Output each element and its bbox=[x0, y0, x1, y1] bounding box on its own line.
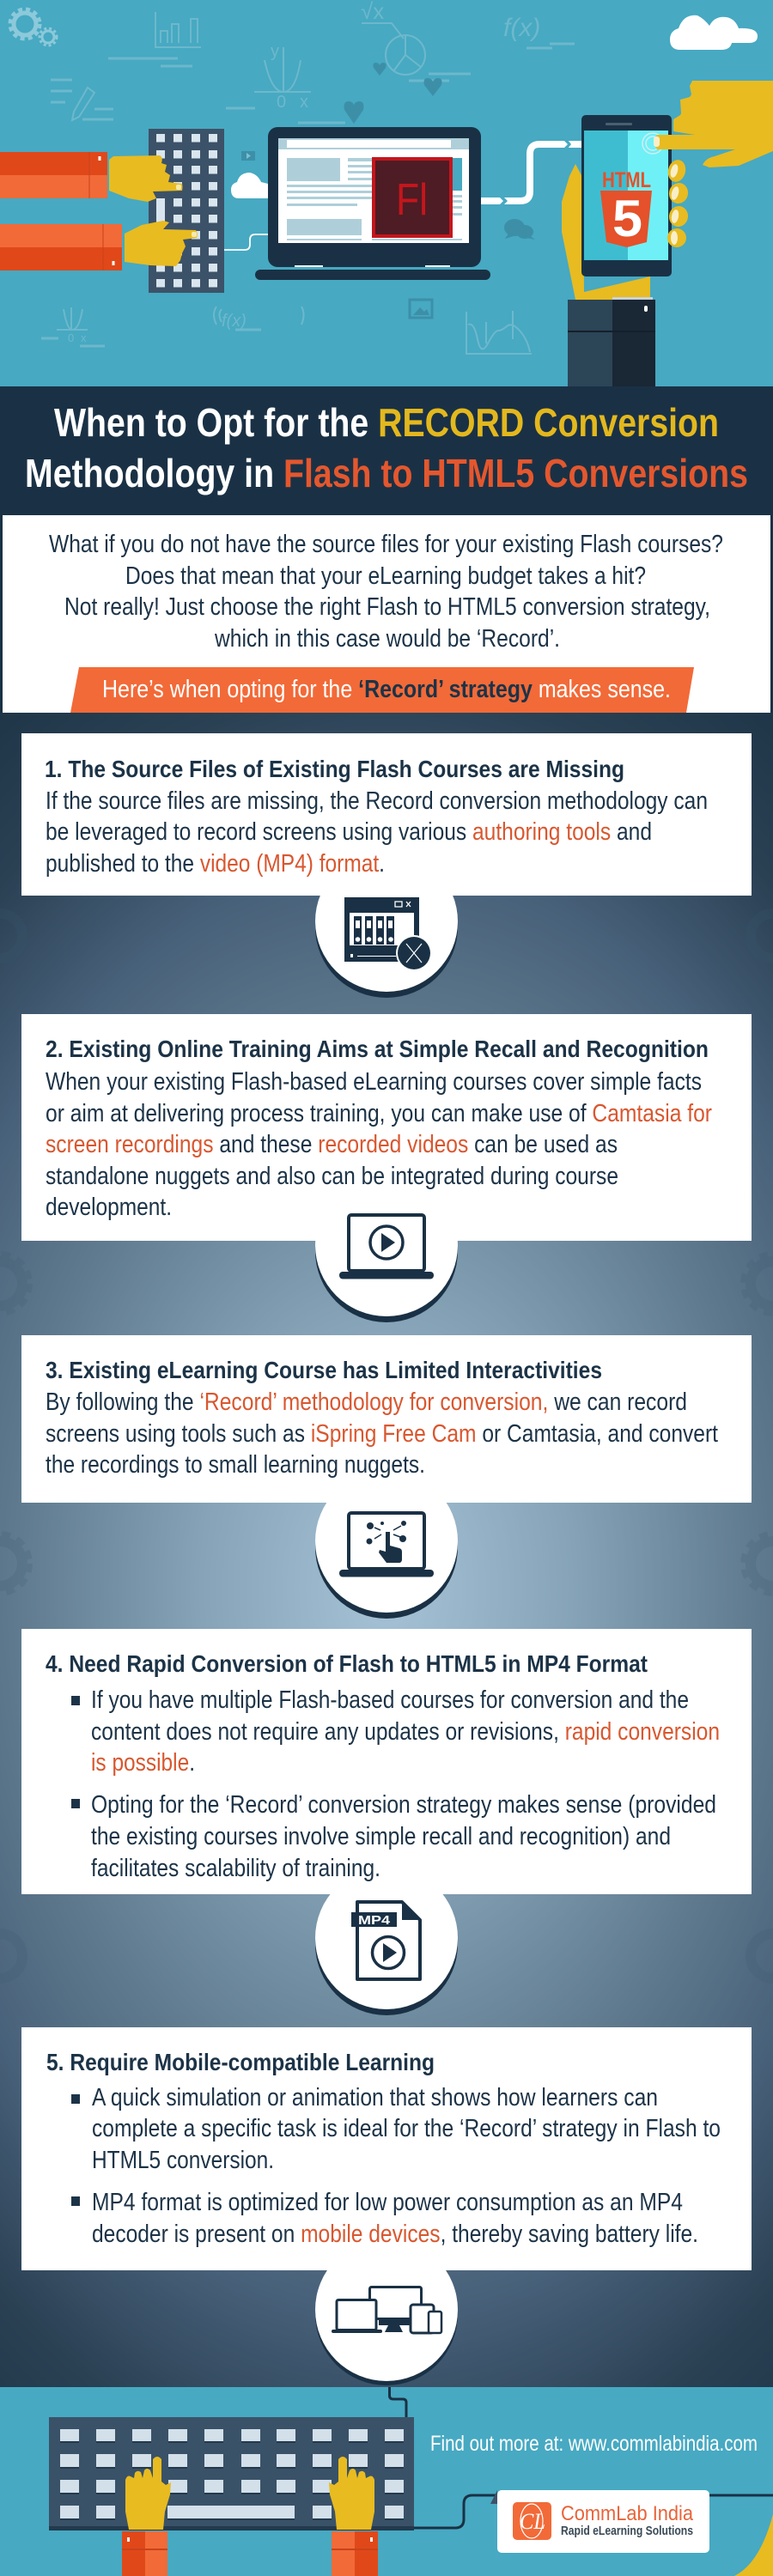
cable from keyboard to logo bbox=[414, 2495, 498, 2528]
doodle: lower parabola: 0 bbox=[68, 331, 74, 344]
heading 4: 4. Need Rapid Conversion of Flash to HTML5 in MP4 Format bbox=[46, 1650, 648, 1677]
bullet 5.2: decoder is present on mobile devices, thereby saving battery life. bbox=[92, 2221, 698, 2248]
doodle: bar chart bbox=[41, 12, 575, 346]
bullet 4.1: is possible. bbox=[91, 1749, 195, 1777]
doodle: pencil bbox=[72, 88, 94, 120]
body 2: standalone nuggets and also can be integrated during course bbox=[46, 1163, 618, 1190]
bullet 5.1: HTML5 conversion. bbox=[92, 2147, 274, 2174]
body 1: be leveraged to record screens using various authoring tools and bbox=[46, 818, 652, 846]
lower hand holding phone bbox=[562, 164, 650, 300]
header illustration bbox=[0, 0, 773, 386]
doodle: parabola graph: y bbox=[271, 42, 279, 61]
doodle: parabola graph: 0 bbox=[277, 93, 286, 112]
bullet 4.2: facilitates scalability of training. bbox=[91, 1855, 380, 1882]
doodle: parabola graph: x bbox=[300, 93, 308, 112]
bullet 5.1: A quick simulation or animation that shows how learners can bbox=[92, 2084, 658, 2111]
logo mark: CL bbox=[520, 2509, 545, 2534]
body 3: By following the ‘Record’ methodology for conversion, we can record bbox=[46, 1388, 687, 1416]
panel: card 2 bbox=[21, 1014, 752, 1241]
logo card bbox=[497, 2490, 709, 2553]
doodle: lower line chart bbox=[466, 311, 532, 354]
bullet 5.2: MP4 format is optimized for low power consumption as an MP4 bbox=[92, 2189, 683, 2216]
right typing hand bbox=[329, 2457, 374, 2530]
doodle: pie chart bbox=[362, 23, 425, 75]
icon: image doodle bbox=[410, 300, 432, 318]
intro text: Does that mean that your eLearning budget takes a hit? bbox=[125, 562, 646, 590]
body 2: screen recordings and these recorded videos can be used as bbox=[46, 1131, 618, 1158]
body 3: the recordings to small learning nuggets. bbox=[46, 1451, 425, 1479]
laptop bbox=[255, 127, 490, 280]
icon: MP4 file bbox=[351, 1902, 420, 1979]
cable keyboard to laptop bbox=[224, 234, 268, 250]
icon: cloud top right bbox=[670, 15, 758, 50]
doodle: f(x) with waves: f(x) bbox=[222, 312, 247, 331]
icon: cloud small bbox=[231, 173, 268, 198]
body 1: published to the video (MP4) format. bbox=[46, 850, 385, 878]
corner accent bbox=[734, 2514, 773, 2576]
icon: speech bubbles bbox=[504, 219, 535, 240]
upper left hand bbox=[109, 155, 182, 202]
panel: card 1 bbox=[21, 733, 752, 896]
doodle: lower parabola: x bbox=[81, 331, 87, 344]
intro text: which in this case would be ‘Record’. bbox=[214, 625, 560, 653]
circle 5 backdrop bbox=[315, 2239, 458, 2385]
orange banner bbox=[70, 667, 694, 713]
bullet 4.2 bbox=[71, 1791, 716, 1882]
title band bbox=[0, 386, 773, 713]
upper left arm bbox=[0, 152, 107, 198]
body 2 bbox=[46, 1068, 712, 1221]
icon: recording window bbox=[344, 897, 432, 971]
lower left hand bbox=[125, 221, 198, 266]
lower left arm bbox=[0, 224, 122, 270]
body 3 bbox=[46, 1388, 718, 1479]
body 3: screens using tools such as iSpring Free Cam or Camtasia, and convert bbox=[46, 1420, 718, 1448]
flash logo bbox=[374, 159, 451, 236]
heading 3: 3. Existing eLearning Course has Limited Interactivities bbox=[46, 1357, 602, 1383]
icon: MP4 file: MP4 bbox=[358, 1913, 391, 1928]
orange banner: Here’s when opting for the ‘Record’ strategy makes sense. bbox=[102, 676, 671, 703]
icon: laptop with touch hand bbox=[339, 1513, 434, 1577]
connector arrow laptop to phone bbox=[481, 140, 581, 205]
flash logo: Fl bbox=[396, 175, 428, 225]
bullet 4.1: content does not require any updates or revisions, rapid conversion bbox=[91, 1718, 720, 1746]
cable from circle to keyboard bbox=[390, 2387, 406, 2417]
upper right hand pointing bbox=[654, 81, 773, 167]
icon: laptop with play bbox=[339, 1215, 434, 1279]
intro panel bbox=[3, 515, 770, 713]
body 1 bbox=[46, 787, 708, 878]
icon: devices bbox=[332, 2287, 441, 2333]
footer bbox=[49, 2387, 773, 2576]
panel: card 4 bbox=[21, 1629, 752, 1894]
smartphone bbox=[581, 115, 672, 276]
logo wordmark: CommLab India bbox=[561, 2502, 694, 2525]
heading 1: 1. The Source Files of Existing Flash Courses are Missing bbox=[45, 756, 624, 782]
circle 4 backdrop bbox=[315, 1867, 458, 2015]
fingers on phone bbox=[666, 158, 691, 247]
body 2: or aim at delivering process training, you can make use of Camtasia for bbox=[46, 1100, 712, 1127]
bullet 5.2 bbox=[71, 2189, 698, 2248]
icon: play button doodle bbox=[241, 151, 255, 161]
bullet 5.1 bbox=[71, 2084, 721, 2174]
title line 1: When to Opt for the RECORD Conversion bbox=[54, 400, 719, 445]
circle 2 backdrop bbox=[315, 1174, 458, 1322]
footer keyboard bbox=[49, 2417, 414, 2530]
panel: card 3 bbox=[21, 1335, 752, 1503]
panel: card 5 bbox=[21, 2027, 752, 2270]
doodle: hearts bbox=[344, 63, 441, 124]
icon: gears bbox=[10, 9, 57, 46]
gradient background bbox=[0, 713, 773, 2387]
intro text bbox=[49, 531, 723, 653]
heading 5: 5. Require Mobile-compatible Learning bbox=[46, 2049, 435, 2075]
left typing hand bbox=[125, 2457, 171, 2530]
logo tagline: Rapid eLearning Solutions bbox=[561, 2524, 693, 2538]
body 2: development. bbox=[46, 1194, 172, 1221]
doodle: parabola graph bbox=[254, 42, 311, 112]
left forearm bbox=[122, 2531, 167, 2576]
bullet 4.1 bbox=[71, 1686, 720, 1777]
doodle: f(x) with waves bbox=[214, 307, 304, 331]
circle 3 backdrop bbox=[315, 1470, 458, 1619]
right forearm bbox=[332, 2531, 378, 2576]
doodle: f(x): f(x) bbox=[503, 14, 540, 42]
HTML5 badge: HTML bbox=[602, 168, 651, 192]
sleeve bbox=[568, 297, 655, 386]
keyboard left bbox=[149, 129, 224, 293]
logo mark bbox=[513, 2502, 551, 2540]
HTML5 badge: 5 bbox=[612, 190, 642, 247]
circle 1 backdrop bbox=[315, 851, 458, 998]
HTML5 badge bbox=[600, 168, 652, 247]
bullet 4.2: the existing courses involve simple recall and recognition) and bbox=[91, 1823, 671, 1850]
doodle: lower parabola bbox=[57, 307, 88, 344]
footer band background bbox=[0, 2387, 773, 2576]
